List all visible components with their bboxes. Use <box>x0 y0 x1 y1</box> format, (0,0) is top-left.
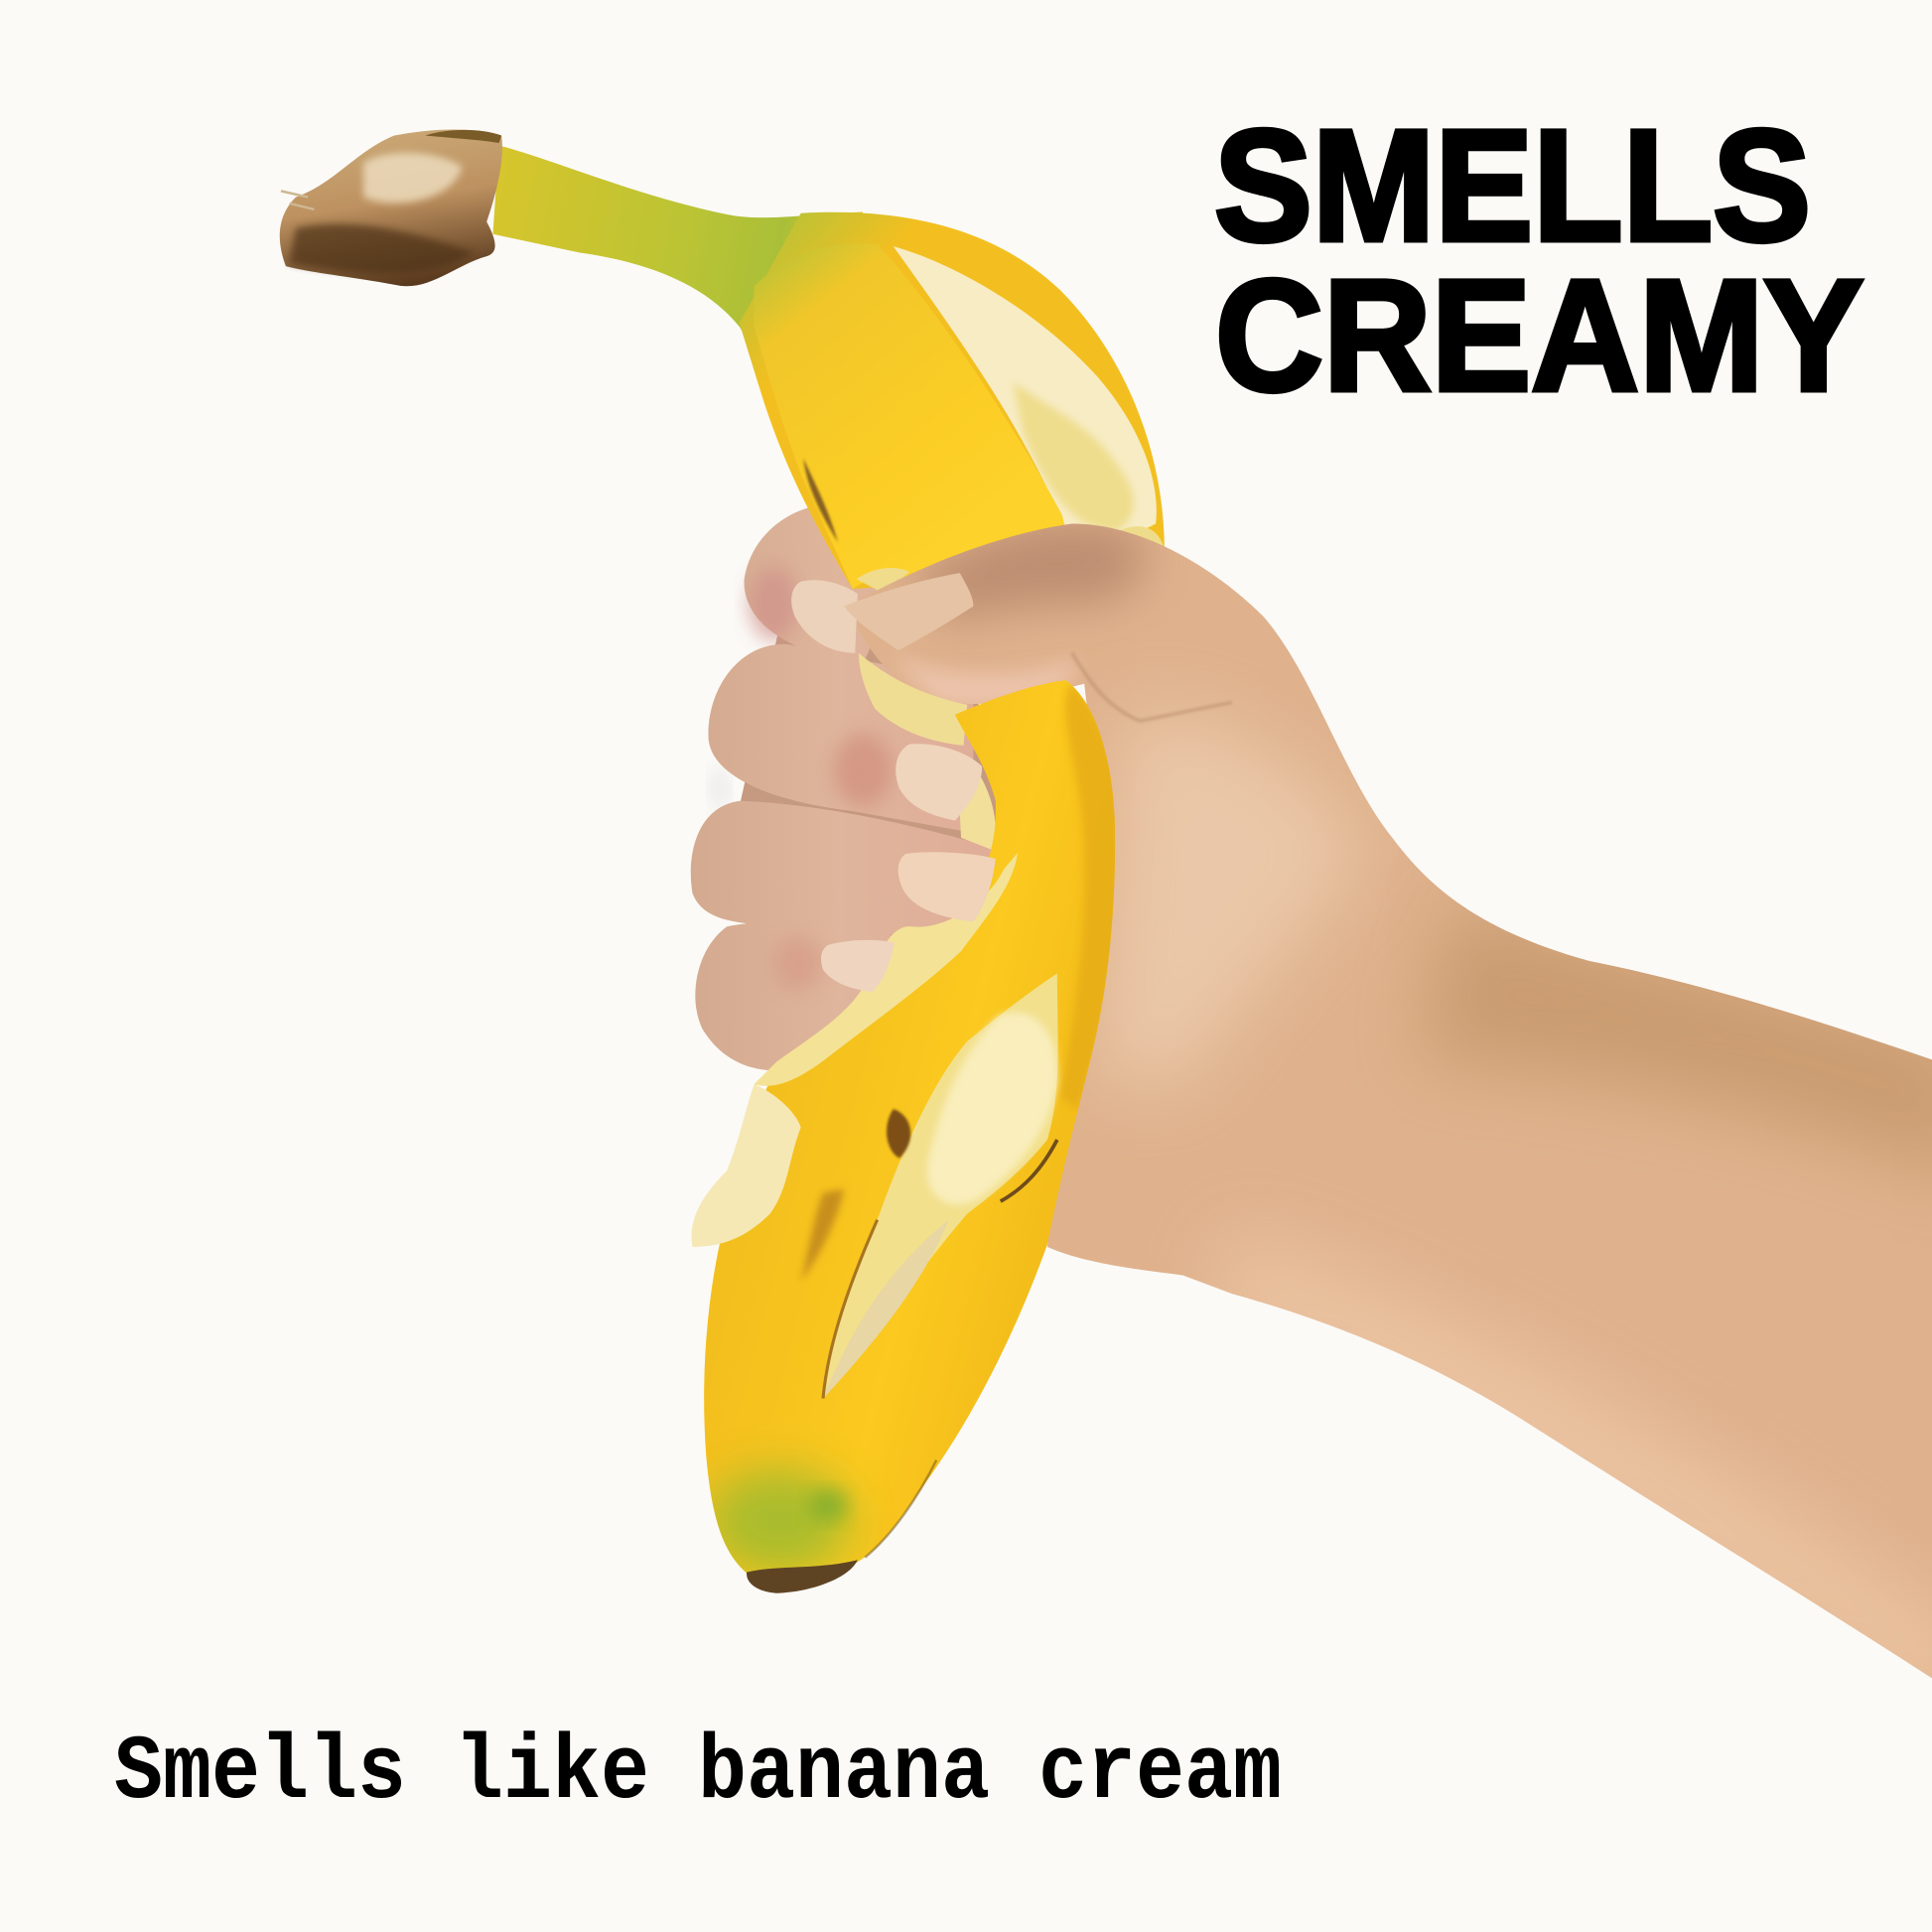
banana: lower section <box>692 653 1121 1593</box>
caption: Smells like banana cream <box>114 1721 1282 1825</box>
exposed cream flesh <box>894 246 1157 548</box>
title: CREAMY <box>1215 246 1863 424</box>
green blossom end <box>707 1470 850 1574</box>
outer peel back <box>740 212 1165 589</box>
fingernail: thumb <box>844 573 973 650</box>
cream tufts near the thumb <box>857 568 909 594</box>
main lower banana body <box>704 680 1115 1580</box>
photo: hand squeezing a banana <box>280 129 1932 1725</box>
blossom tip <box>747 1560 858 1593</box>
finger: middle <box>708 644 973 833</box>
title: SMELLS <box>1214 96 1811 274</box>
banana stem cap <box>280 129 502 286</box>
shadow backing behind the fingers <box>727 530 1008 1062</box>
thumb underside light <box>899 658 1078 704</box>
thumb top shadow <box>911 520 1146 622</box>
front peel flap <box>755 243 1078 589</box>
title <box>1214 96 1863 424</box>
fingernail: little <box>821 940 895 992</box>
main tear with flesh <box>823 973 1058 1399</box>
cream strip along fingers <box>755 853 1018 1086</box>
finger: little <box>695 922 905 1070</box>
fingernail: ring <box>898 852 996 921</box>
hand and forearm <box>848 520 1932 1725</box>
arm top shading <box>1417 899 1932 1182</box>
fingernail: middle <box>896 744 982 821</box>
banana: upper section <box>492 145 1165 594</box>
arm lower highlight <box>1217 1243 1932 1678</box>
bruise marks <box>887 1109 910 1159</box>
finger: ring <box>691 801 1001 935</box>
brown mark on peel <box>803 459 838 542</box>
cream blob at left <box>692 1084 801 1247</box>
palm light <box>1097 713 1368 1084</box>
soft shadow left of the fingers <box>711 766 728 811</box>
peel edge shading <box>1060 686 1115 1108</box>
fingernail: index <box>791 580 858 653</box>
finger: index <box>745 503 899 665</box>
thumb crease <box>1072 653 1232 721</box>
edge shadow by tip <box>865 1460 936 1558</box>
cream under thumb <box>859 653 967 746</box>
banana stem <box>492 145 888 407</box>
